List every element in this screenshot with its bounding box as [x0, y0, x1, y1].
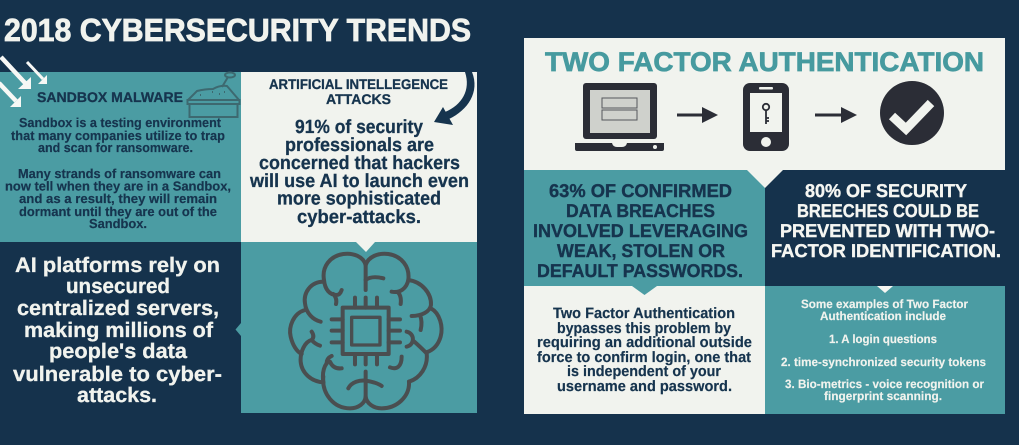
- panel: examples of two factor: 1. A login questions: [829, 332, 937, 346]
- icon: phone with key: [743, 83, 789, 151]
- sandbox heading: SANDBOX MALWARE: [37, 89, 183, 105]
- panel: 80 percent preventable: FACTOR IDENTIFICATION.: [771, 240, 1001, 261]
- sandbox body text: now tell when they are in a Sandbox,: [5, 178, 231, 194]
- panel: examples of two factor: 3. Bio-metrics - voice recognition or: [785, 377, 984, 391]
- panel: how two factor works: [524, 286, 765, 414]
- panel: how two factor works: force to confirm login, one that: [537, 349, 751, 366]
- icon: sandbox with shovel: [188, 72, 240, 117]
- icon: brain with chip: [290, 254, 442, 408]
- icon: white arrows: [0, 57, 47, 107]
- panel: 80 percent preventable: PREVENTED WITH TWO-: [780, 220, 995, 241]
- ai heading: ATTACKS: [326, 91, 391, 107]
- ai heading: [269, 76, 448, 107]
- panel: examples of two factor: [765, 286, 1005, 414]
- text block: ai platforms: unsecured: [66, 275, 170, 298]
- panel: 80 percent preventable: BREECHES COULD BE: [797, 200, 979, 221]
- panel: 63 percent of breaches: 63% OF CONFIRMED: [549, 180, 732, 201]
- ai statistic text: [249, 117, 469, 228]
- text block: ai platforms: AI platforms rely on: [15, 254, 220, 277]
- arrow: laptop to phone: [677, 107, 718, 123]
- sandbox body text: and scan for ransomware.: [38, 140, 193, 155]
- panel: artificial intelligence attacks: [241, 72, 477, 252]
- panel: brain chip: [236, 242, 477, 413]
- sandbox body text: [5, 115, 231, 231]
- arrow: phone to check: [815, 107, 857, 123]
- panel: examples of two factor: 2. time-synchronized security tokens: [781, 355, 986, 369]
- sandbox body text: Many strands of ransomware can: [18, 166, 221, 181]
- panel: how two factor works: username and password.: [557, 378, 732, 395]
- text block: ai platforms: vulnerable to cyber-: [13, 363, 222, 386]
- panel: examples of two factor: fingerprint scanning.: [824, 389, 942, 403]
- panel: 80 percent preventable: 80% OF SECURITY: [805, 180, 968, 201]
- panel: 63 percent of breaches: WEAK, STOLEN OR: [557, 240, 725, 261]
- ai statistic text: cyber-attacks.: [297, 207, 421, 228]
- panel: how two factor works: bypasses this problem by: [557, 320, 732, 337]
- icon: laptop: [575, 83, 664, 151]
- panel: 63 percent of breaches: INVOLVED LEVERAGING: [533, 220, 748, 241]
- sandbox body text: dormant until they are out of the: [19, 204, 217, 219]
- sandbox body text: that many companies utilize to trap: [11, 128, 225, 143]
- panel: 63 percent of breaches: DEFAULT PASSWORDS.: [537, 260, 743, 281]
- ai statistic text: 91% of security: [295, 117, 423, 138]
- panel: 80 percent preventable: [765, 170, 1005, 286]
- panel: examples of two factor: Some examples of Two Factor: [801, 297, 968, 311]
- ai heading: ARTIFICIAL INTELLEGENCE: [269, 76, 448, 92]
- icon: curved arrow: [434, 72, 475, 125]
- text block: ai platforms: people's data: [49, 340, 187, 363]
- panel: how two factor works: Two Factor Authentication: [553, 305, 735, 322]
- panel: two factor authentication header: [524, 38, 1005, 170]
- panel: how two factor works: is independent of your: [567, 363, 721, 380]
- icon: check circle: [880, 81, 944, 145]
- text block: ai platforms: centralized servers,: [17, 297, 219, 320]
- text block: ai platforms: attacks.: [77, 384, 157, 407]
- ai statistic text: concerned that hackers: [259, 153, 460, 174]
- text block: ai platforms: making millions of: [24, 319, 214, 342]
- text block: ai platforms: [13, 254, 222, 407]
- panel: 63 percent of breaches: DATA BREACHES: [566, 200, 715, 221]
- panel: how two factor works: requiring an additional outside: [537, 334, 752, 351]
- ai statistic text: more sophisticated: [277, 188, 441, 210]
- ai statistic text: professionals are: [285, 135, 434, 156]
- panel: sandbox malware: [0, 57, 241, 242]
- title: 2018 CYBERSECURITY TRENDS: [4, 12, 471, 48]
- two factor title: TWO FACTOR AUTHENTICATION: [545, 47, 984, 77]
- ai statistic text: will use AI to launch even: [249, 171, 469, 192]
- panel: examples of two factor: Authentication include: [820, 309, 946, 323]
- header pointer notch: [747, 170, 783, 188]
- panel: 63 percent of breaches: [524, 170, 765, 286]
- sandbox body text: Sandbox.: [89, 216, 147, 231]
- sandbox body text: and as a result, they will remain: [19, 191, 217, 206]
- sandbox body text: Sandbox is a testing environment: [19, 115, 222, 130]
